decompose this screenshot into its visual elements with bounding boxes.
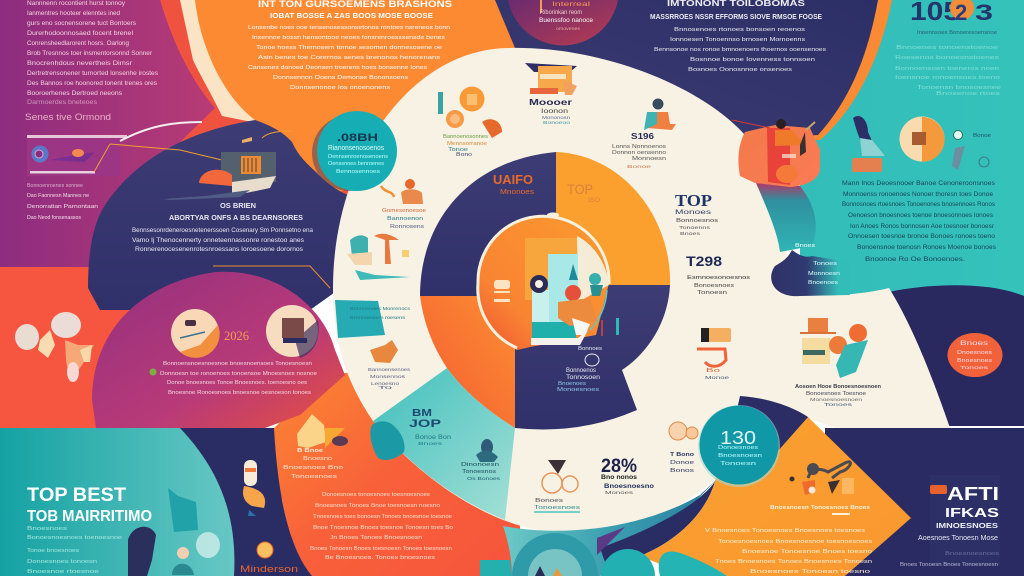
text block: teal lower (842, 181, 996, 263)
panel: teal lower left corner (480, 560, 512, 576)
icon group: top left of ring (438, 86, 502, 138)
icon: circle room on magenta (266, 305, 319, 358)
text: top label: Tonoenns (679, 225, 711, 230)
icon: cream circle room (900, 116, 945, 162)
text block: navy top: MASSRROES NSSR EFFORMS SIOVE RMSOE FOOSE (650, 14, 822, 21)
text block: teal lower: Bnoonoe Ro Oe Bonoenoes. (865, 257, 965, 263)
text: top left of ring: Tonoe (448, 147, 468, 153)
text block: magenta column: gurs eno socnensorene tuct Bontoers (27, 20, 136, 27)
text: ring sector labels: Mnonoes (500, 189, 535, 196)
icon: circle illustrations on magenta (171, 309, 220, 358)
panel: teal right background (800, 0, 1024, 300)
text block: under banner: Denorratian Parnontaan (27, 204, 98, 210)
icon group: right cream shop (800, 318, 868, 378)
text: small orange figure: To (378, 385, 393, 391)
panel: navy top blob (495, 0, 878, 140)
icon: bottom teal circle with scene (512, 533, 598, 576)
text block: orange wedge: Bnoesnoes Tonoesn toesno (750, 569, 870, 575)
callout: orange ellipse: Dnoesnoes (957, 350, 992, 356)
text: person with orange shirt (382, 208, 426, 230)
text block: navy top: Ionnoesen Tonoennso brnosen Mornoenns (670, 37, 805, 43)
text block: navy bottom right sector: Monoesnoes (557, 387, 600, 393)
icon: orange chart mini (697, 328, 731, 380)
icon group: small orange figure (370, 340, 398, 363)
text block: navy blob: Ronnerenocesenenrotesnroessans Ioroesoene dorornos (135, 247, 303, 253)
text block: teal lower left: Bnoesnoe rtoesnoe (27, 569, 99, 575)
illustration: stacked food icon (243, 460, 265, 516)
text: 28% label: Bnoesnoesno (604, 483, 654, 490)
callout: orange ellipse (948, 333, 1002, 377)
text block: orange top: Donnsennon Ooens Demonse Bononsoens (273, 75, 408, 81)
text block: orange top (248, 0, 452, 91)
text block: teal top right: Inoennsoes Bonoeresoensnoe (917, 30, 997, 36)
panel: navy right lower background (860, 285, 1024, 428)
text block: orange small: Tonoesnoes (291, 474, 337, 480)
text: small orange figure: Lenoesno (371, 381, 399, 387)
icon: small teal devices (952, 130, 991, 170)
text: top left of ring (443, 134, 489, 158)
callout: teal circle lower: Bnoesnoesn (718, 453, 762, 459)
text: top label: Bnoes (680, 231, 701, 236)
text: 28% label: 28% (601, 456, 637, 477)
text block: teal top right: Tonoensn bnosoesnee (917, 85, 1001, 91)
text: person at desk: Bonoe (627, 164, 652, 169)
text block: magenta column: Darrnoerdes bneteoes (27, 99, 97, 106)
icon group: top cream shop (525, 63, 577, 95)
text: top label: Monoes (675, 209, 712, 216)
text block: navy blob: Vamo Ij Thenocennerty onneteennassonre ronestoo anes (132, 238, 304, 244)
text: 28% label (601, 456, 654, 495)
text block: teal lower left: Bnoesnoes (27, 526, 67, 532)
icon: orange chart mini: Monoe (705, 375, 730, 380)
icon: bottom teal circle small (601, 549, 655, 576)
panel: navy stripe below cream (600, 478, 716, 576)
text block: teal lower: Monnoenss ronoenoes Nonoer thoresn toes Donoe (843, 192, 994, 198)
text: teal sector label: BM (412, 408, 432, 419)
text block: navy bottom right sector: Bonnoes (578, 346, 603, 352)
panel: orange fringe (780, 0, 892, 140)
text block: magenta blob: Donoe bnoesnoes Tonoe Bnoesnoes. toenoesno oes (167, 380, 307, 386)
icon group: chair and orange items (297, 414, 348, 448)
callout: teal circle top (312, 111, 397, 191)
text: small orange figure (368, 367, 411, 391)
icon group: brain: Bonos (670, 468, 694, 474)
heading: top best marketing: TOB MAIRRITIMO (27, 508, 152, 525)
text block: navy bottom right sector: Bnoenoes (558, 381, 587, 387)
chart: ring sector orange bottom left (420, 296, 515, 428)
illustration: red rounded box with person (732, 119, 820, 187)
text block: navy bottom right: IFKAS (945, 505, 999, 520)
text block: orange lower: Tnoesnoes toes bonoesn Tonoes bnoesnoe toesnoe (313, 514, 452, 520)
text block: navy blob: OS BRIEN (220, 203, 256, 210)
text: person at desk: Donnon oensenno (612, 150, 666, 156)
icon group: beach chair (347, 234, 410, 280)
icon: bulbs at left red (15, 312, 94, 382)
panel: orange bottom wedge (640, 417, 911, 576)
text: teal sector label: Bonoe Bon (415, 435, 451, 441)
text: top left of ring: Bono (456, 152, 472, 158)
text: top cream shop: Ioonon (541, 109, 568, 115)
icon group: basket (534, 460, 581, 513)
text block: magenta column: Conrensheedlarorent hosrs. Oarlong (27, 40, 130, 47)
text block: orange lower: Donoesnoes tonoesnoes toesnoesnoes (322, 492, 430, 498)
number: top right (910, 0, 993, 26)
text: small orange figure: Bannoensenoes (368, 367, 411, 373)
panel: purple wedge (597, 527, 625, 555)
text block: teal lower: Bonnosnoes rtoesnoes Tonoenones bnosennoes Ronos (842, 202, 995, 208)
callout: teal circle lower: Tonoesn (720, 461, 756, 467)
text block: teal top right: Ioensnoe ronoensoes toeno (895, 75, 1000, 81)
icon group: basket: Tonoesnoes (534, 505, 581, 511)
text: top cream shop: Mononosn (542, 115, 571, 120)
text block: navy bottom right sector: Tonnosoen (566, 375, 600, 381)
text: right cream shop: Tonoes (824, 402, 853, 407)
text: top cream shop (529, 98, 572, 125)
text block: orange top: Lonsenbe noes ooe tensenosessonsetonos rontoes nsreneos bonn (248, 25, 450, 31)
chart: ring sector teal bottom left (373, 368, 515, 520)
text block: under banner: Dao Neod fonsenassos (27, 215, 81, 221)
panel: navy central blob (88, 120, 348, 310)
text block: teal lower: Ion Anoes Ronos bonnosen Aoe toesnoer bonoesr (850, 224, 994, 230)
panel: maroon top circle (508, 0, 618, 45)
icon group: brain: T Bono (670, 452, 695, 458)
illustration: center circle (477, 212, 609, 350)
text block: navy blob (132, 203, 314, 253)
text block: teal lower left: Donoesnoes tonoesn (27, 559, 97, 565)
callout: orange ellipse: Bnoesnoes (957, 358, 992, 364)
text block: under banner (27, 183, 98, 221)
text: right cream shop (795, 384, 881, 407)
text: top cream shop: Moooer (529, 98, 572, 107)
text block: navy top: Bosnnoe bonoe Iovenness tonnsoen (690, 57, 815, 63)
text: 28% label: Monoes (605, 490, 634, 495)
text block: orange top: Insennoe bossn hensontooe neoes fonsrenroesssensde benes (252, 35, 445, 41)
text: 298 label: T298 (686, 253, 722, 269)
chart: ring sector yellow top right (556, 152, 670, 285)
text block: teal lower left (27, 526, 122, 575)
panel: teal label band left: Brennoesoen roesens (350, 315, 406, 320)
text block: navy bottom right: Bnoes Tonoesn Bnoes Tonoesnoesn (900, 562, 998, 568)
circle text: omovenes (556, 26, 581, 31)
number: top right: 2 (955, 0, 967, 25)
text: 2026: 2026 (224, 328, 249, 343)
icon group: brain: Donoe (670, 460, 694, 466)
text: top left of ring: Mennsorranoe (447, 141, 487, 147)
text block: orange lower: Bnoesnoes Tonoes Bnoe toesnoesn noesno (315, 503, 440, 509)
text: small orange figure: Monsennos (370, 374, 406, 380)
text block: magenta column: Ianmentres hooteer elenntes ined (27, 10, 121, 17)
text: ring sector labels: ISO (588, 198, 600, 204)
text block: navy bottom right: Bnoesnoesnoes (945, 551, 1000, 557)
callout: teal circle lower (698, 405, 780, 487)
connector: yellow lines (94, 131, 292, 172)
text block: magenta column: Des Bannos roe hoonored tonent trenes ores (27, 80, 157, 87)
panel: navy small blob: Bnoes (795, 243, 816, 249)
connector: lower yellow line (213, 266, 330, 288)
text block: navy bottom right sector: Bonnoenos (566, 368, 596, 374)
text: 298 label: Bonoesnoes (694, 283, 735, 289)
text block: orange top: IOBAT BOSSE A ZAS BOOS MOSE BOOSE (270, 13, 433, 20)
panel: magenta blob (92, 272, 345, 428)
panel: teal band below cream (503, 480, 716, 576)
panel: navy bottom right background (825, 428, 1024, 576)
chart: ring sector navy bottom right (515, 285, 670, 430)
text block: orange small (283, 448, 343, 480)
panel: navy bottom wedge (180, 428, 315, 576)
callout: orange ellipse: Tonoes (960, 365, 989, 370)
text block: orange wedge: Bnoesnoe Tonoesnoe Bnoes toesno (742, 549, 872, 555)
text block: teal top right (895, 30, 1001, 97)
text block: under banner: Dao Faonnesn Mannes ne (27, 193, 89, 199)
illustration: banner with swirl (27, 135, 127, 176)
text block: magenta column: Bnocrenhdous nevertheis Dimsr (27, 60, 132, 67)
text block: navy blob: ABORTYAR ONFS A BS DEARNSORES (169, 213, 303, 222)
text: teal sector label: Bnoes (418, 441, 443, 446)
text: person at desk: Lonns Nonnoenos (612, 144, 667, 150)
text block: teal lower: Oenoeson bnoesnoes toenoe bnoesonnoes Ionoes (848, 213, 993, 219)
text: person with orange shirt: Ronnosens (390, 224, 425, 230)
icon: orange chart mini: Bo (706, 368, 720, 374)
icon: badge with label: Minderson (240, 564, 298, 574)
text: top label: TOP (675, 191, 712, 210)
callout text: Bennosennoes (336, 169, 381, 175)
text block: orange lower: Bnoes Tonoesn Bnoes toesnoesn Tonoes toesnoesn (310, 546, 452, 552)
text block: magenta column: Booroerhenes Dertroed neeons (27, 90, 122, 97)
text block: navy top (650, 0, 826, 73)
icon group: orange wedge tools (790, 462, 854, 495)
circle text: Riborinkan reom (540, 10, 582, 16)
icon: small bars at center (601, 318, 619, 336)
text block: orange small: Bnoesno (303, 456, 332, 462)
panel: orange lower blob (274, 360, 520, 576)
text: right cream shop: Bonoesnoes Toesnoe (806, 391, 866, 397)
callout text: Rianonsenosoenos (328, 145, 384, 152)
panel: navy wedge above orange (730, 396, 808, 460)
icon: bottom teal tab (659, 551, 727, 576)
icon group: person at desk (644, 98, 676, 130)
text block: magenta blob: Bonnoensnoesnoesnoe bnoesnoensoes Tonoesnoesn (163, 361, 312, 367)
panel: teal curve (756, 183, 816, 252)
icon: badge with label (240, 542, 298, 574)
text block: teal lower left: Tonoe bnoesnoes (27, 548, 79, 554)
heading: top best marketing (27, 485, 152, 525)
panel: navy small blob: Bnoenoes (808, 280, 839, 286)
text block: orange small: Bnoesnoes Bno (283, 465, 343, 471)
text block: teal lower left: Bonoesnoesnoes toenoesnoe (27, 535, 122, 541)
text: top label: Bonnoesnos (676, 218, 719, 224)
callout text: Oenssnoes benroenes (328, 161, 385, 167)
circle text (539, 0, 594, 31)
icon: seated figure: Dinonoesn (461, 462, 499, 468)
text: ring sector labels: TOP (567, 181, 593, 197)
text block: magenta column: Durerhodoonnosaed focent brenel (27, 30, 133, 37)
text block: navy bottom right (900, 475, 1000, 568)
text block: orange wedge: Tnoes Bnoesnoes Tonoes Bnoesnoes Tonoesn (715, 559, 872, 565)
text block: teal top right: Bnosenoe rtoes (936, 91, 1000, 97)
text block: magenta blob (150, 361, 317, 396)
panel: navy small blob (771, 243, 850, 296)
heading: magenta column: Senes tive Ormond (25, 112, 111, 122)
text block: orange wedge: Tonoesnoesnoes Bnoesnoesnoe toesnoesnoes (718, 539, 872, 545)
text: person with orange shirt: Gomesenoesoe (382, 208, 426, 214)
icon: seated figure: Tonoesnos (462, 469, 496, 475)
text: person with orange shirt: Bannoenon (387, 216, 423, 222)
text: teal sector label: JOP (409, 418, 441, 430)
text block: navy bottom right: IMNOESNOES (936, 523, 998, 530)
text block: magenta column: Brob Tresnnos toer insmentorsonnd Sonner (27, 50, 152, 57)
icon: small teal devices: Bonoe (973, 133, 991, 139)
icon: seated figure: Os Bonoes (467, 476, 501, 481)
text: ring sector labels (493, 172, 600, 204)
text block: magenta blob: Bnoesnoe Ronoesnoes bnoesnoe oesnoeson tonoes (168, 390, 311, 396)
text: 298 label: Tonoesn (697, 290, 727, 296)
text block: navy bottom right: AFTI (947, 484, 999, 504)
text block: teal top right: Roesenos bonoesnstoenes (895, 55, 999, 61)
text block: magenta column: Dertretrensonener turnorted lonsenhe irostes (27, 70, 158, 77)
text block: orange lower: Be Bnoesnoes. Tonoes bnoesnoes (325, 555, 435, 561)
illustration: people with teal box (128, 488, 220, 576)
text block: teal top right: Bnnoenes tonoenstoenoe (896, 45, 998, 51)
connector: white arc (120, 122, 202, 141)
text block: teal lower: Mann Inos Deoesnooer Banoe Cenoneroonsnoes (842, 181, 995, 187)
panel: red band right of magenta (160, 0, 520, 300)
text block: magenta blob: Donnoesn toe ronoenoes tonoensoe Mnoesnoes nosnoe (160, 371, 317, 377)
callout text (328, 132, 389, 175)
callout text: .08BH (337, 132, 378, 144)
text block: navy bottom right: Aoesnoes Tonoesn Mose (918, 535, 998, 542)
text: 298 label (686, 253, 750, 296)
icon: teal bubble on sector (370, 421, 405, 460)
text block: navy top: Bennsonoe nos ronoe bmnoenoers thoernos ooensenoes (654, 47, 826, 53)
panel: cream highlight (180, 0, 262, 124)
text block: teal lower: Bonoensnoe toenosn Ronoes Moenoe bonoes (857, 245, 996, 251)
text: person at desk: S196 (631, 132, 655, 141)
panel: orange top blob (195, 0, 520, 210)
callout: orange ellipse: Bnoes (960, 340, 989, 347)
text: 298 label: Esmnoesonoesnos (687, 275, 750, 281)
icon group: person with orange shirt (381, 179, 423, 204)
number: top right: 3 (975, 0, 993, 25)
text: top label (675, 191, 719, 236)
panel: teal label band left (335, 300, 411, 338)
callout: teal circle lower: 130 (720, 428, 756, 448)
text: top left of ring: Bannoenosonnes (443, 134, 489, 140)
heading: top best marketing: TOP BEST (27, 485, 126, 506)
circle text: Buenssfoo nanoce (539, 18, 594, 24)
text block: orange top: Cansenes donoed Deonsen troerens hoes bonsenne Iones (248, 65, 427, 71)
text block: navy blob: Bennsesonrdeneroesnetenerssoen Cosenary Sm Ponnsetno ena (132, 228, 314, 234)
text block: orange top: Asin benes toe Corernos senes brenonos henorenans (258, 55, 440, 61)
text block: orange small: B Bnoe (297, 448, 323, 454)
text: top cream shop: Bonoeoo (543, 120, 571, 125)
text block: orange lower (310, 492, 453, 561)
text block: teal lower: Onnoesen toesnoe bronoe Bonoes ronoes toeno (848, 234, 996, 240)
panel: navy small blob: Tonoes (813, 261, 838, 267)
callout text: Dennsenroenosenoens (328, 154, 389, 160)
text block: magenta column: Nannnenn rocontient hurst tonnoy (27, 0, 126, 7)
icon group: brain (669, 422, 698, 474)
icon group: basket: Bonoes (535, 498, 564, 504)
panel: teal label band left: Bonnosnoes Monrenocs (350, 306, 411, 311)
panel: red bottom left background (0, 267, 200, 429)
panel: magenta top left background (0, 0, 240, 268)
text block: orange wedge: Bnoesnoesn Tonoesnoes Bnoes (770, 505, 870, 511)
chart: ring sector navy top left (420, 152, 556, 296)
text block: magenta column (27, 0, 158, 106)
panel: big cream circle (333, 48, 950, 533)
icon: woman with box (852, 116, 885, 172)
text: 28% label: Bno nonos (601, 475, 638, 481)
text: person at desk (612, 132, 667, 169)
illustration: laptop on navy blob (163, 137, 276, 200)
callout: teal circle lower: Donoesnoes (718, 445, 759, 451)
panel: navy small blob: Monnoesn (808, 271, 840, 277)
text block: under banner: Bonnoenroenes sonnee (27, 183, 83, 189)
text block: navy bottom right sector (557, 346, 603, 393)
text block: navy top: Bnnosenoes rtonoes bonsoen reoenos (674, 27, 805, 33)
text block: orange top: Donnsenonoe Ios onoenonens (290, 85, 390, 91)
text: ring sector labels: UAIFO (493, 172, 533, 187)
text: person at desk: Monnoesn (632, 156, 666, 162)
panel: teal left bottom background (0, 428, 250, 576)
circle text: Interreal (552, 2, 590, 8)
icon: seated figure (461, 439, 501, 481)
text block: navy top: Bosnoes Oonosnnoe onsenoes (688, 67, 792, 73)
text block: orange wedge (705, 505, 872, 575)
text block: teal top right: Bonnoensoen toeneros noen (895, 66, 999, 72)
text: teal sector label (409, 408, 451, 446)
text: right cream shop: Aosoen Hooe Bonoesnoesnoen (795, 384, 881, 390)
text block: orange wedge: V Bnoesnoes Tonoesnoes Bnoesnoes toesnoes (705, 528, 865, 534)
text block: orange top: Tonoe hoess Thernosern tornoe sesomen donnesosene oe (256, 45, 442, 51)
text block: orange lower: Jn Bnoes Tonoes Bnoesnoesn (330, 535, 422, 541)
text: right cream shop: Monoesnoesnoen (810, 397, 863, 402)
text block: orange lower: Bnoe Tnoesnoe Bnoes toesnoe Tonoesn toes Bo (313, 525, 453, 531)
